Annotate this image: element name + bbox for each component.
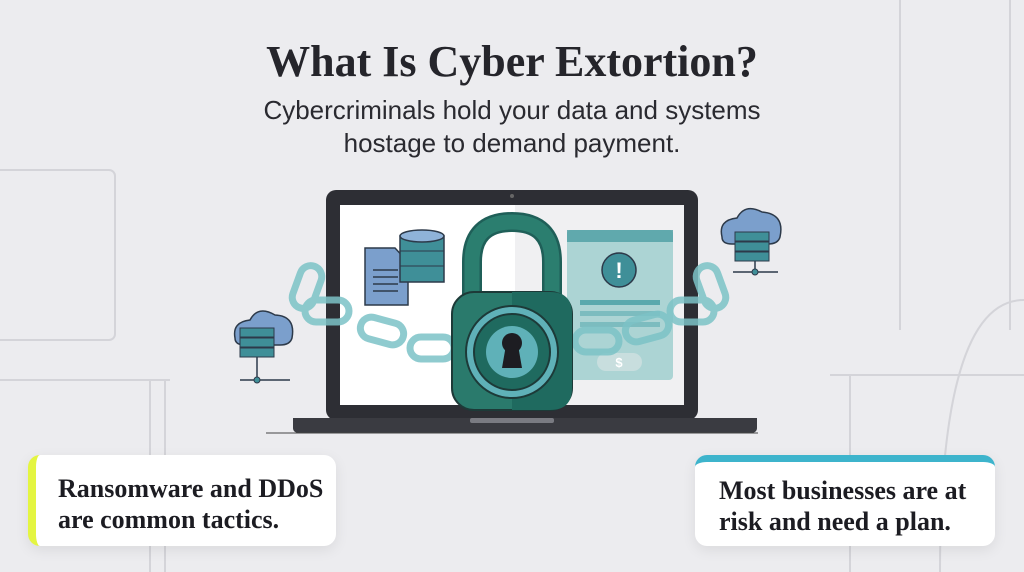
- title: What Is Cyber Extortion?: [266, 37, 758, 86]
- ransom note panel: $: [615, 355, 623, 370]
- icon: cloud server left: [235, 311, 293, 383]
- callout: businesses at risk card: Most businesses are at: [719, 476, 966, 505]
- ransom note panel: !: [615, 258, 623, 283]
- callout: businesses at risk card: risk and need a plan.: [719, 507, 951, 536]
- ransom note panel: [567, 230, 673, 380]
- subtitle: Cybercriminals hold your data and systems: [263, 95, 761, 125]
- callout: businesses at risk card: [695, 455, 995, 546]
- subtitle: [263, 95, 761, 158]
- subtitle: hostage to demand payment.: [344, 128, 680, 158]
- chains: [289, 263, 729, 359]
- icon: cloud server right: [721, 209, 781, 275]
- icon: padlock: [452, 222, 572, 410]
- icon: document and database: [365, 230, 444, 305]
- callout: ransomware card: [28, 455, 336, 546]
- callout: ransomware card: Ransomware and DDoS: [58, 474, 323, 503]
- callout: ransomware card: are common tactics.: [58, 505, 279, 534]
- laptop: [266, 190, 758, 433]
